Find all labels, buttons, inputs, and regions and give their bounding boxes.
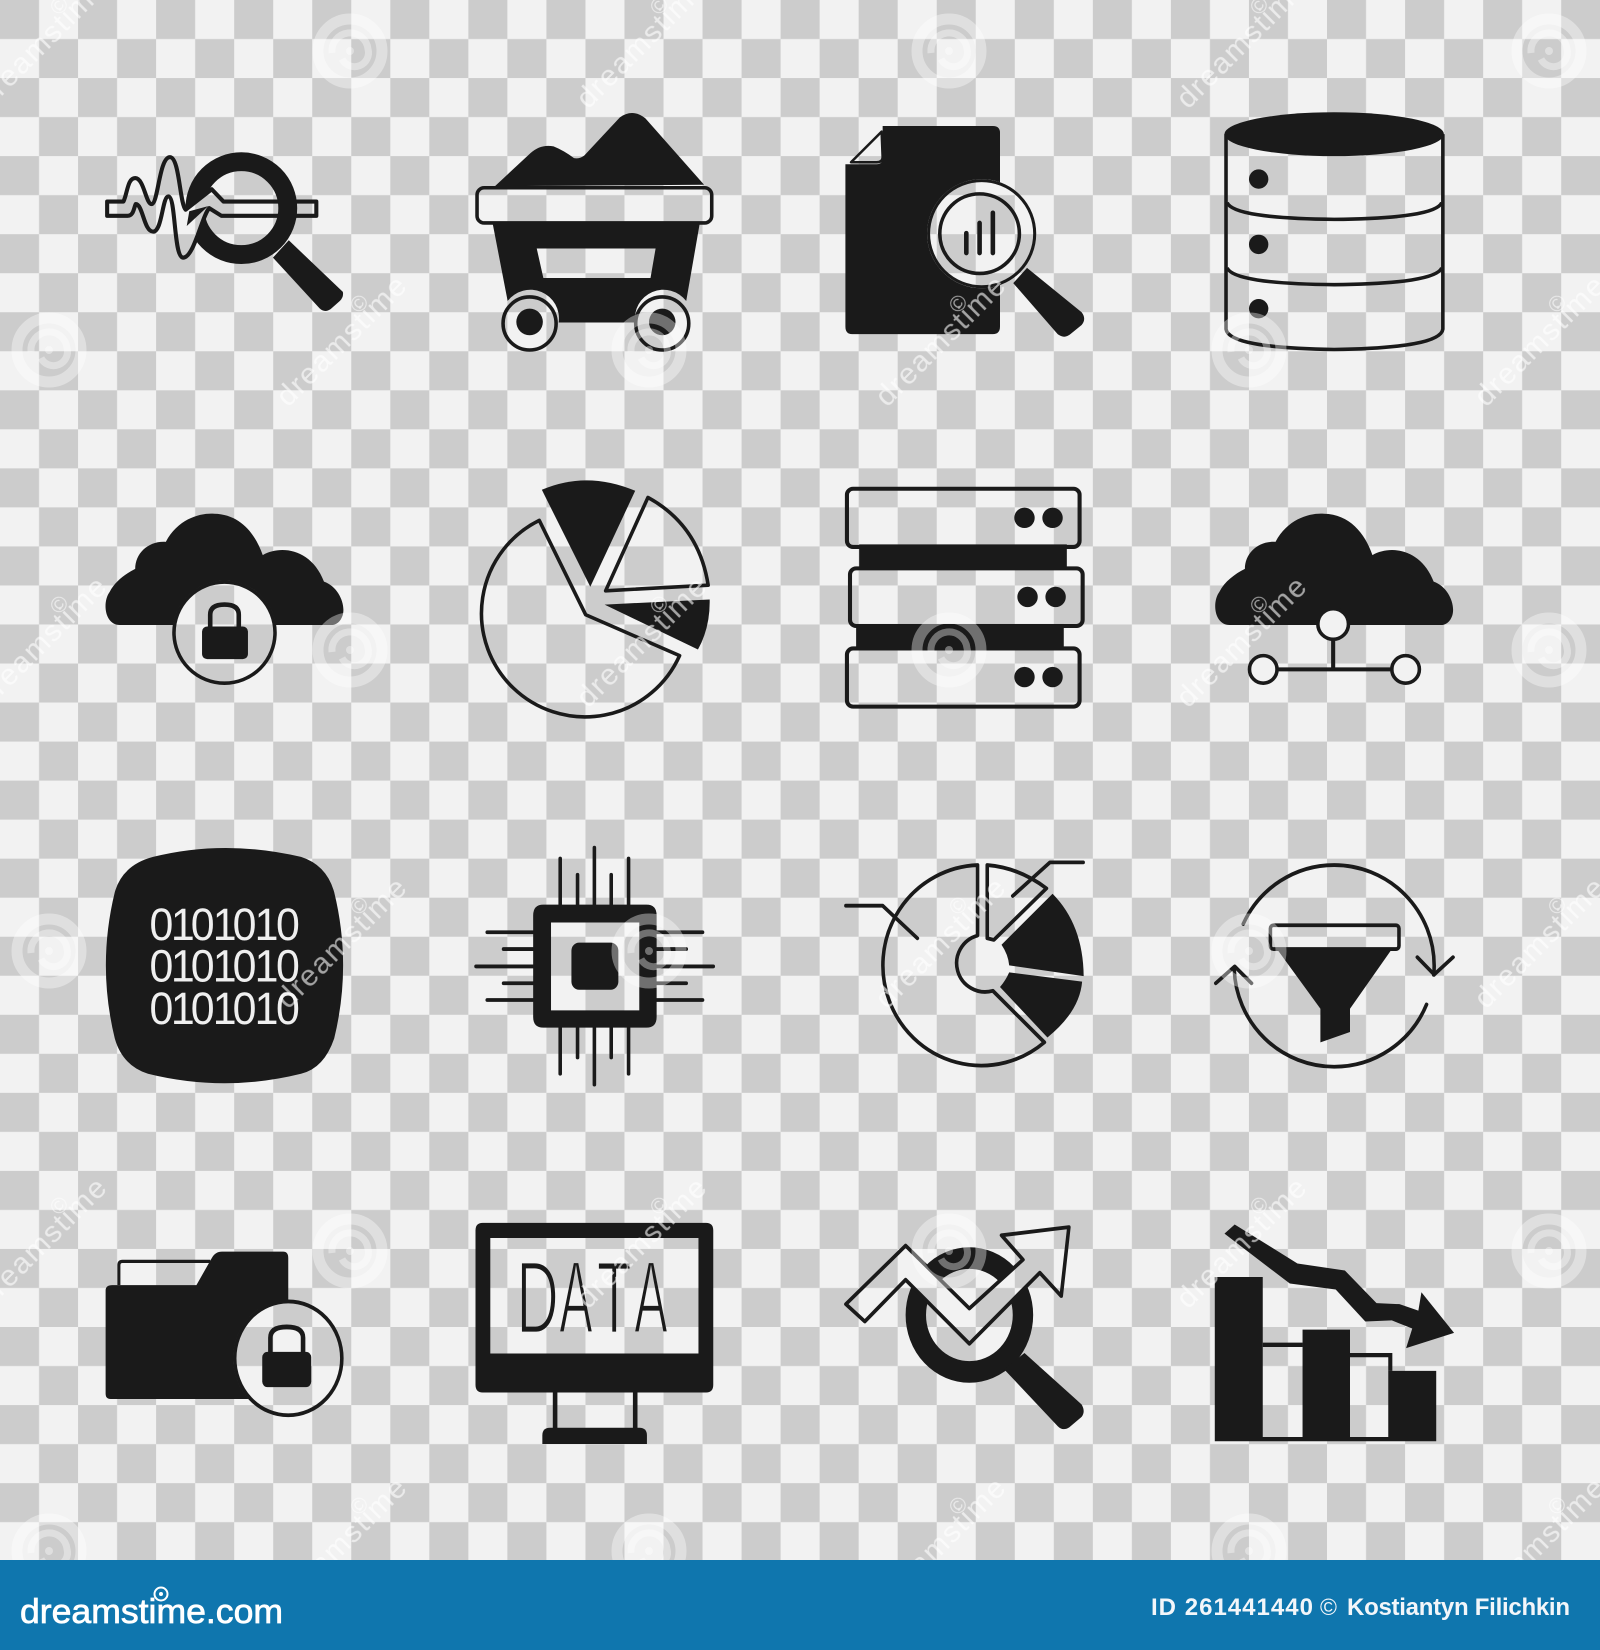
icon: binary code tile: 0101010 <box>149 900 300 950</box>
watermark: diagonal dreamstime text: © <box>645 590 674 619</box>
banner credit: image id and author: Kostiantyn Filichkin <box>1347 1594 1570 1621</box>
icon: cloud with padlock <box>106 514 343 683</box>
watermark: diagonal dreamstime text: dreamstime <box>270 1471 413 1615</box>
watermark: diagonal dreamstime text: dreamstime <box>270 269 413 413</box>
icon: folder with padlock <box>106 1252 342 1415</box>
watermark: diagonal dreamstime text: © <box>1543 891 1572 920</box>
banner logo: dreamstime.com: dreamstime.com <box>20 1593 283 1631</box>
watermark: diagonal dreamstime text: dreamstime <box>869 269 1012 413</box>
watermark: diagonal dreamstime text: © <box>45 1191 74 1220</box>
watermark: diagonal dreamstime text: © <box>944 891 973 920</box>
watermark: diagonal dreamstime text: © <box>345 1491 374 1520</box>
watermark: diagonal dreamstime text: dreamstime <box>270 871 413 1015</box>
watermark: diagonal dreamstime text: dreamstime <box>869 1471 1012 1615</box>
icon: database cylinder <box>1224 112 1444 349</box>
icon: exploded pie chart <box>481 480 710 717</box>
watermark: diagonal dreamstime text: © <box>345 289 374 318</box>
icon: computer monitor showing DATA: A <box>559 1240 593 1356</box>
icon: arrow trend under magnifying glass <box>846 1227 1084 1429</box>
icon: computer monitor showing DATA: D <box>516 1240 559 1356</box>
icon: donut chart with leader lines <box>846 862 1084 1066</box>
icon: document with magnifier and bar chart <box>845 126 1084 337</box>
watermark: diagonal dreamstime text: dreamstime <box>570 1171 713 1315</box>
watermark: diagonal dreamstime text: dreamstime <box>1170 570 1313 714</box>
footer banner <box>0 1560 1600 1650</box>
watermark: diagonal dreamstime text: © <box>1543 289 1572 318</box>
icon: binary code tile: 0101010 <box>149 941 300 992</box>
watermark: diagonal dreamstime text: © <box>1245 590 1274 619</box>
watermark: diagonal dreamstime text: © <box>944 1491 973 1520</box>
icon: computer monitor showing DATA: A <box>634 1240 668 1356</box>
watermark: diagonal dreamstime text: © <box>944 289 973 318</box>
banner credit: image id and author: ID 261441440 <box>1151 1594 1313 1621</box>
icon: funnel with circular arrows <box>1216 865 1453 1067</box>
banner credit: image id and author: © <box>1320 1594 1337 1620</box>
watermark: diagonal dreamstime text: dreamstime <box>1170 1171 1313 1315</box>
icon: mining cart with ore <box>477 113 712 350</box>
banner credit: image id and author <box>1151 1594 1570 1621</box>
watermark: diagonal dreamstime text: © <box>1543 1491 1572 1520</box>
icon: cloud with network nodes <box>1215 514 1453 683</box>
icon: computer monitor showing DATA <box>476 1223 713 1444</box>
watermark: diagonal dreamstime text: © <box>645 1191 674 1220</box>
watermark: diagonal dreamstime text: © <box>1245 1191 1274 1220</box>
icon: server rack <box>847 489 1083 707</box>
icon: binary code tile <box>106 848 343 1083</box>
watermark: diagonal dreamstime text: © <box>345 891 374 920</box>
icon: computer monitor showing DATA: T <box>597 1240 632 1356</box>
icon: processor chip <box>476 848 713 1085</box>
watermark: diagonal dreamstime text: dreamstime <box>869 871 1012 1015</box>
icon: binary code tile: 0101010 <box>149 984 300 1034</box>
watermark: diagonal dreamstime text: © <box>45 590 74 619</box>
icon: waveform under magnifying glass <box>107 157 343 311</box>
watermark: diagonal dreamstime text: dreamstime <box>570 570 713 714</box>
icon: falling bar chart with arrow <box>1215 1224 1454 1441</box>
